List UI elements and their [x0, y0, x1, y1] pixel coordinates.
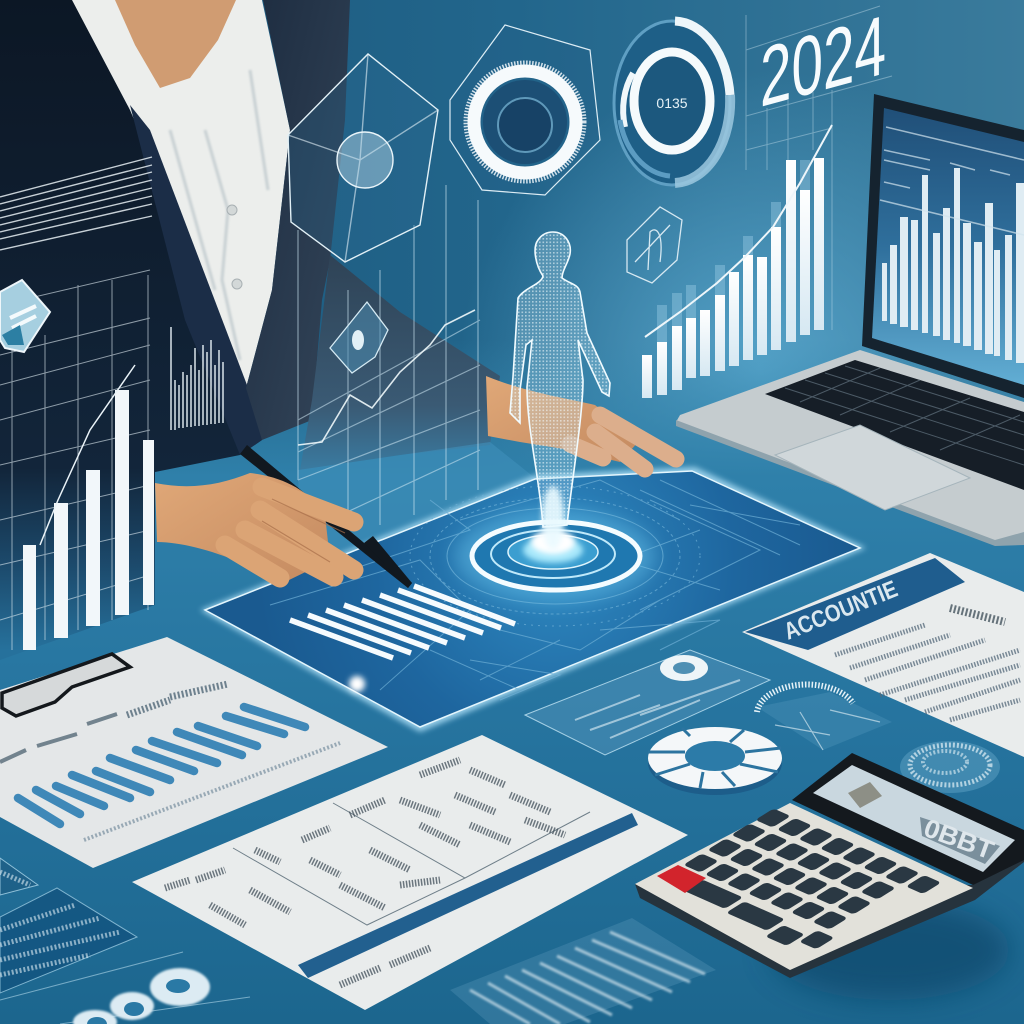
inner table lines: [233, 803, 590, 925]
left hand with pen: [155, 445, 412, 588]
desk surface: [0, 340, 1024, 1024]
right hand: [486, 376, 676, 469]
screen bars: [882, 168, 1024, 363]
display icon and digits: 0BBT: [920, 812, 998, 865]
hologram vertical grid: [298, 185, 480, 530]
laptop edge: [676, 420, 1024, 546]
lens flare: [349, 676, 365, 692]
small spike chart: [171, 327, 223, 430]
panel: holographic tablet: [200, 467, 866, 732]
report header bar: [745, 558, 965, 650]
tablet texture: [270, 480, 800, 700]
red key: [657, 865, 706, 893]
right hand fingers: [570, 415, 676, 469]
laptop screen: [872, 108, 1024, 385]
glass number marks: [73, 968, 210, 1024]
footer scribble: [84, 743, 340, 840]
glass stripes bottom centre: [450, 918, 716, 1024]
glass mark right: [900, 741, 1000, 793]
glass frame lines: [0, 952, 250, 1024]
gem icon: [0, 280, 50, 352]
chart grid lines: [746, 6, 892, 330]
icon: hexagon hologram: [288, 54, 438, 262]
glasses: [2, 654, 130, 716]
hologram figure: [510, 232, 610, 527]
jacket right lapel and torso: [246, 0, 350, 440]
trend line: [645, 125, 832, 337]
tablet white stripes: [290, 586, 515, 658]
sleeve: [300, 255, 500, 470]
hologram trend line: [298, 310, 475, 445]
report text lines: [835, 625, 1020, 720]
laptop: [676, 94, 1024, 546]
segmented disc: [648, 727, 782, 795]
glass gauge: [757, 685, 892, 750]
paper: blue bars sheet: [0, 637, 388, 868]
trackpad: [775, 425, 970, 510]
calculator display housing: [792, 753, 1024, 885]
glass chart left of disc: [525, 650, 770, 755]
keyboard: [765, 360, 1024, 490]
left trend line: [40, 365, 135, 545]
light beam: [542, 486, 564, 550]
glowing base rings: [455, 510, 655, 602]
shirt buttons: [227, 205, 242, 289]
gauge label: 0135: [656, 95, 688, 111]
neck skin: [115, 0, 236, 88]
small hologram icon: [627, 207, 682, 283]
laptop lid: [862, 94, 1024, 398]
paper: accounting report: [742, 553, 1024, 757]
shirt: [72, 0, 290, 388]
bar chart: centre right: [642, 158, 824, 398]
hologram panel below sleeve: [298, 442, 535, 565]
jacket body with chart backdrop: [0, 0, 262, 660]
ghost bar tops: [657, 160, 810, 345]
blue bars: [18, 707, 305, 824]
laptop base: [676, 350, 1024, 541]
icon: octagon with glowing ring: [450, 25, 600, 195]
figure mesh fill: [510, 232, 610, 527]
calculator keys: [650, 808, 941, 960]
blue stripe: [298, 813, 638, 978]
left hologram header stripes: [0, 157, 152, 250]
report title: ACCOUNTIE: [780, 576, 902, 646]
small hexagon on sleeve: [330, 302, 388, 373]
calculator: [635, 753, 1024, 978]
header scribble: [0, 714, 117, 762]
left bars: [23, 390, 154, 650]
wall glow: [0, 0, 1024, 700]
pen: [240, 445, 412, 588]
pen tip: [364, 536, 412, 588]
finger shadow lines: [262, 499, 345, 562]
jacket left lapel: [130, 105, 262, 455]
scribbles: [165, 760, 565, 985]
fingers: [225, 487, 354, 578]
glass panels bottom left: [0, 858, 250, 1024]
shirt shadow folds: [170, 70, 268, 360]
display icon and digits: [848, 782, 1000, 865]
screen header: [880, 127, 1024, 235]
calculator shadow: [770, 900, 1010, 1000]
left chart grid and bars: [0, 270, 223, 650]
palm: [155, 473, 330, 582]
paper: ledger sheet: [132, 735, 688, 1010]
icon: circular gauge: [614, 21, 730, 185]
